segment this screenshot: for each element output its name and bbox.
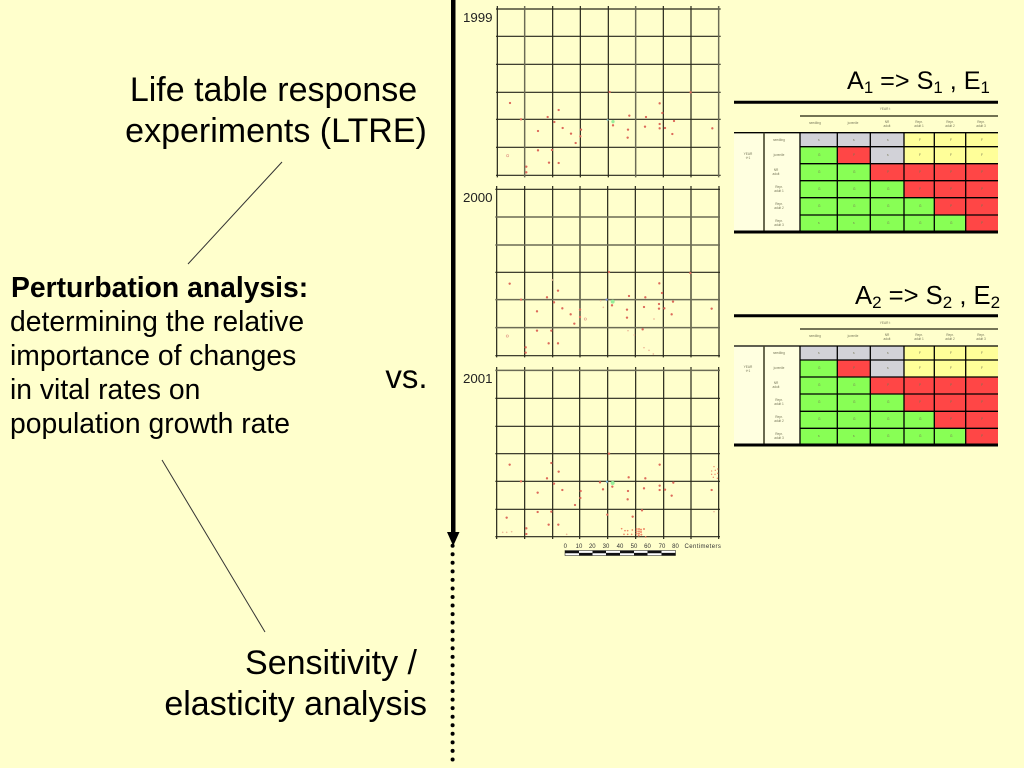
text block: perturbation analysis definition — [10, 271, 308, 439]
header row: Repr. — [915, 333, 923, 337]
header row — [809, 321, 986, 341]
grid and points 2001 — [495, 367, 720, 539]
header row: juvenile — [847, 334, 859, 338]
arrow: solid time axis — [447, 0, 460, 546]
cell symbols: ssGGGP — [818, 221, 983, 225]
row labels: adult 3 — [774, 223, 784, 227]
matrix cells — [800, 133, 998, 232]
scale bar: centimeters: Centimeters — [684, 544, 721, 550]
header row: Repr. — [915, 120, 923, 124]
heading: A2 => S2, E2: 2 — [872, 293, 882, 312]
cell symbols — [818, 138, 983, 225]
header row: adult 3 — [976, 337, 986, 341]
text block: perturbation analysis definition: Perturbation analysis: — [11, 271, 308, 303]
row labels: seedling — [773, 138, 785, 142]
row labels: YEAR — [744, 365, 753, 369]
header row: Repr. — [946, 333, 954, 337]
heading: A2 => S2, E2: , E — [952, 282, 991, 310]
map: 2001 — [463, 367, 720, 539]
row labels — [744, 351, 785, 440]
cell symbols: sssFFF — [818, 351, 983, 355]
header row — [809, 107, 986, 128]
row labels: NR — [774, 381, 779, 385]
scale bar: centimeters: 40 — [617, 544, 624, 550]
row labels: adult 3 — [774, 436, 784, 440]
header row: NR — [885, 120, 890, 124]
scale bar: centimeters: 60 — [644, 544, 651, 550]
header row: Repr. — [977, 333, 985, 337]
cell symbols: ssGGGP — [818, 434, 983, 438]
header row: juvenile — [847, 121, 859, 125]
heading: life table response experiments: Life table response — [130, 71, 417, 109]
heading: A1 => S1, E1: , E — [943, 67, 981, 95]
row labels: t+1 — [746, 156, 750, 160]
header row: adult 1 — [914, 124, 924, 128]
text block: perturbation analysis definition: population growth rate — [10, 407, 290, 439]
header row: seedling — [809, 121, 821, 125]
connector line: perturbation analysis to sensitivity analysis — [162, 460, 265, 632]
header row: YEAR t — [880, 321, 890, 325]
row labels: seedling — [773, 351, 785, 355]
heading: A2 => S2, E2: 2 — [943, 293, 952, 312]
row labels: Repr. — [775, 219, 783, 223]
cell symbols: GGPPPP — [818, 383, 983, 387]
year label: 1999: 1999 — [463, 10, 493, 25]
row labels: juvenile — [773, 153, 785, 157]
header row: adult 3 — [976, 124, 986, 128]
table rules — [734, 133, 998, 232]
row labels: t+1 — [746, 369, 750, 373]
text block: perturbation analysis definition: in vital rates on — [10, 373, 200, 405]
cell symbols: GGGPPP — [818, 400, 983, 404]
row labels: adult 1 — [774, 402, 784, 406]
cell symbols: GGGGPP — [818, 204, 983, 208]
row labels: Repr. — [775, 415, 783, 419]
header row: Repr. — [977, 120, 985, 124]
year label: 2001: 2001 — [463, 371, 493, 386]
grid and points 1999 — [496, 6, 721, 177]
row labels — [744, 138, 785, 227]
row labels: adult — [773, 385, 780, 389]
scale bar: centimeters: 10 — [576, 544, 583, 550]
header row: adult — [884, 337, 891, 341]
scale bar: centimeters: 70 — [659, 544, 666, 550]
header row: YEAR t — [880, 107, 890, 111]
map: 1999 — [463, 6, 721, 177]
scale bar: centimeters: 50 — [631, 544, 638, 550]
text: vs.: vs. — [385, 358, 428, 395]
cell symbols: GGGPPP — [818, 187, 983, 191]
row labels: YEAR — [744, 152, 753, 156]
heading: A1 => S1, E1: => S — [873, 67, 933, 95]
table rules — [734, 346, 998, 445]
header row: adult 2 — [945, 124, 955, 128]
table: matrix A1 — [734, 102, 998, 232]
heading: A2 => S2, E2: => S — [882, 282, 943, 310]
year label: 2000: 2000 — [463, 190, 493, 205]
matrix cells — [800, 346, 998, 445]
row labels: adult — [773, 172, 780, 176]
arrow: dotted time axis continuation — [451, 546, 455, 761]
cell symbols: GGPPPP — [818, 170, 983, 174]
text block: perturbation analysis definition: importance of changes — [10, 339, 296, 371]
scale bar: centimeters: 20 — [589, 544, 596, 550]
header row: adult — [884, 124, 891, 128]
row labels: Repr. — [775, 202, 783, 206]
header row: NR — [885, 333, 890, 337]
heading: A1 => S1, E1: 1 — [864, 78, 873, 97]
heading: A2 => S2, E2: 2 — [991, 293, 1000, 312]
row labels: Repr. — [775, 432, 783, 436]
row labels: NR — [774, 168, 779, 172]
heading: A1 => S1, E1: 1 — [933, 78, 943, 97]
cell symbols: GPsFFF — [818, 153, 983, 157]
row labels: Repr. — [775, 398, 783, 402]
row labels: adult 1 — [774, 189, 784, 193]
scale bar: centimeters: 0 — [564, 544, 568, 550]
scale bar: centimeters — [564, 544, 721, 556]
heading: sensitivity / elasticity analysis — [164, 644, 427, 723]
map: 2000 — [463, 186, 720, 357]
scale bar: centimeters: 30 — [603, 544, 610, 550]
header row: adult 2 — [945, 337, 955, 341]
table: matrix A2 — [734, 316, 998, 445]
heading: A1 => S1, E1: 1 — [981, 78, 990, 97]
header row: seedling — [809, 334, 821, 338]
heading: sensitivity / elasticity analysis: Sensitivity / — [245, 644, 418, 682]
heading: sensitivity / elasticity analysis: elasticity analysis — [164, 685, 427, 723]
header row: adult 1 — [914, 337, 924, 341]
row labels: adult 2 — [774, 206, 784, 210]
grid and points 2000 — [495, 186, 720, 357]
scale bar: centimeters: 80 — [672, 544, 679, 550]
heading: A2 => S2, E2: A — [855, 282, 872, 310]
text block: perturbation analysis definition: determining the relative — [10, 305, 304, 337]
connector line: LTRE to perturbation analysis — [188, 162, 282, 264]
cell symbols: GPsFFF — [818, 366, 983, 370]
row labels: Repr. — [775, 185, 783, 189]
row labels: juvenile — [773, 366, 785, 370]
cell symbols — [818, 351, 983, 438]
heading: life table response experiments: experiments (LTRE) — [125, 112, 427, 150]
heading: life table response experiments — [125, 71, 427, 150]
cell symbols: sssFFF — [818, 138, 983, 142]
cell symbols: GGGGPP — [818, 417, 983, 421]
row labels: adult 2 — [774, 419, 784, 423]
header row: Repr. — [946, 120, 954, 124]
heading: A1 => S1, E1: A — [847, 67, 864, 95]
